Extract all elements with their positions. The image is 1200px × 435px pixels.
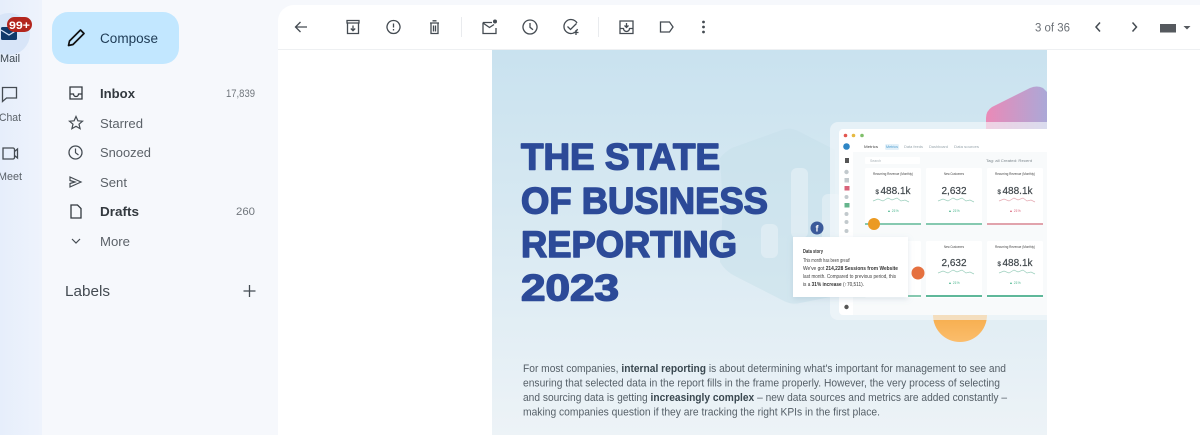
metric card: recurring revenue row two: ▲ 21%: [1009, 281, 1021, 285]
data story popup: We've got 214,228 Sessions from Website: [803, 266, 898, 272]
toolbar dividers: [278, 17, 1200, 50]
app logo: [843, 143, 850, 150]
item: Drafts: 260: [236, 206, 255, 218]
labels heading: Labels: [65, 283, 110, 300]
toolbar: [296, 20, 705, 35]
metric card: recurring revenue: $ 488.1k: [875, 186, 912, 197]
labels heading: [65, 283, 256, 300]
intro paragraph: ensuring that selected data in the report fills in the frame properly. However, the very process of selecting: [523, 378, 1000, 390]
metric card: recurring revenue red: $ 488.1k: [997, 186, 1034, 197]
metric card: new customers: 2,632: [941, 186, 967, 197]
icon: move to: [620, 21, 633, 34]
title: OF BUSINESS: [521, 180, 768, 222]
icon: chat: [2, 88, 16, 102]
icon: previous: [1096, 22, 1100, 32]
item: Snoozed: [69, 145, 151, 160]
dashboard tabs: Metrics: [864, 144, 878, 149]
item: Inbox: [70, 86, 255, 101]
intro paragraph: For most companies, internal reporting is about determining what's important for management to see and: [523, 363, 1006, 375]
item: More: [72, 234, 130, 249]
icon: mail with badge: [0, 13, 32, 55]
icon: spam: [387, 20, 400, 33]
filters: Tag: all Created: Recent: [986, 159, 1032, 163]
compose button: [52, 12, 179, 64]
item: Inbox: Inbox: [100, 86, 136, 101]
title: THE STATE: [521, 136, 720, 178]
metric card: recurring revenue row two: Recurring Revenue (Monthly): [995, 245, 1035, 249]
data story popup: Data story: [803, 249, 823, 255]
icon: archive: [347, 20, 359, 34]
dashboard tabs: Metrics: [886, 145, 898, 149]
item: Sent: [70, 175, 127, 190]
metric card: recurring revenue: ▲ 21%: [887, 209, 899, 213]
icon: unread dot: [493, 20, 497, 24]
icon: mail with badge: 99+: [9, 20, 30, 32]
metric card: recurring revenue row two: [987, 241, 1043, 298]
icon: keyboard: [1160, 24, 1176, 32]
icon: hubspot badge: [912, 266, 924, 280]
dashboard: [830, 122, 1047, 320]
search box: Search: [870, 159, 881, 163]
metric card: recurring revenue: Recurring Revenue (Monthly): [873, 172, 913, 176]
item: Starred: Starred: [100, 116, 143, 131]
background hexagon: [720, 129, 835, 304]
intro paragraph: making companies question if they are tracking the right KPIs in the first place.: [523, 406, 880, 418]
pale bars: [761, 168, 842, 294]
intro paragraph: and sourcing data is getting increasingly complex – new data sources and metrics are added constantly –: [523, 392, 1007, 404]
label: Mail: Mail: [0, 53, 20, 65]
item: Drafts: Drafts: [100, 204, 139, 219]
metric card: recurring revenue red: ▲ 21%: [1009, 209, 1021, 213]
icon: label: [660, 22, 673, 32]
icon: add to tasks: [564, 20, 578, 35]
pink hexagon: [986, 86, 1047, 130]
metric card: recurring revenue red: Recurring Revenue (Monthly): [995, 172, 1035, 176]
item: Drafts: [71, 204, 255, 219]
metric card: new customers row two: [926, 241, 982, 298]
dashboard tabs: Data feeds: [904, 145, 923, 149]
icon: back: [296, 22, 307, 32]
icon: caret: [1184, 26, 1190, 30]
metric card: new customers: ▲ 21%: [948, 209, 960, 213]
item: Starred: [70, 116, 143, 131]
metric card: recurring revenue red: [987, 168, 1043, 225]
icon: video: [3, 148, 18, 159]
data story popup: This month has been great!: [803, 258, 850, 264]
icon: next: [1132, 22, 1136, 32]
metric card: new customers row two: New Customers: [944, 245, 964, 249]
dashboard tabs: Dashboard: [929, 145, 948, 149]
dashboard tabs: Data sources: [954, 145, 979, 149]
metric card: new customers: [926, 168, 982, 225]
icon: facebook badge: [810, 222, 824, 234]
title: [521, 136, 768, 308]
infographic hero: [492, 50, 1047, 435]
icon: orange chart badge: [868, 218, 880, 230]
compose button: Compose: [100, 31, 158, 46]
sidebar icons: [844, 158, 850, 309]
navigation rail: [0, 0, 42, 435]
search box: [865, 157, 920, 164]
folder list: [69, 86, 255, 249]
pagination: [1035, 22, 1190, 34]
metric card: row two left: [865, 241, 921, 298]
orange semicircle: [933, 315, 987, 342]
icon: facebook badge: f: [816, 224, 820, 234]
icon: delete: [430, 21, 439, 34]
dashboard tabs: [864, 144, 979, 150]
icon: more: [702, 21, 705, 33]
window controls: [844, 134, 864, 137]
metric card: new customers row two: ▲ 21%: [948, 281, 960, 285]
data story popup: [793, 237, 908, 297]
metric card: new customers row two: 2,632: [941, 258, 967, 269]
icon: mark unread: [483, 22, 496, 34]
intro paragraph: [523, 363, 1007, 418]
icon: snooze clock: [523, 20, 537, 34]
data story popup: is a 31% increase (↑70,511).: [803, 282, 864, 288]
item: Inbox: 17,839: [226, 88, 255, 100]
pagination: 3 of 36: [1035, 22, 1070, 34]
metric card: new customers: New Customers: [944, 172, 964, 176]
title: REPORTING: [521, 224, 737, 265]
data story popup: last month. Compared to previous period, this: [803, 274, 896, 280]
item: Sent: Sent: [100, 175, 127, 190]
title: 2023: [521, 268, 619, 308]
message panel: [278, 5, 1200, 435]
item: Snoozed: Snoozed: [100, 145, 151, 160]
metric card: recurring revenue row two: $ 488.1k: [997, 258, 1034, 269]
item: More: More: [100, 234, 130, 249]
metric card: recurring revenue: [865, 168, 921, 225]
